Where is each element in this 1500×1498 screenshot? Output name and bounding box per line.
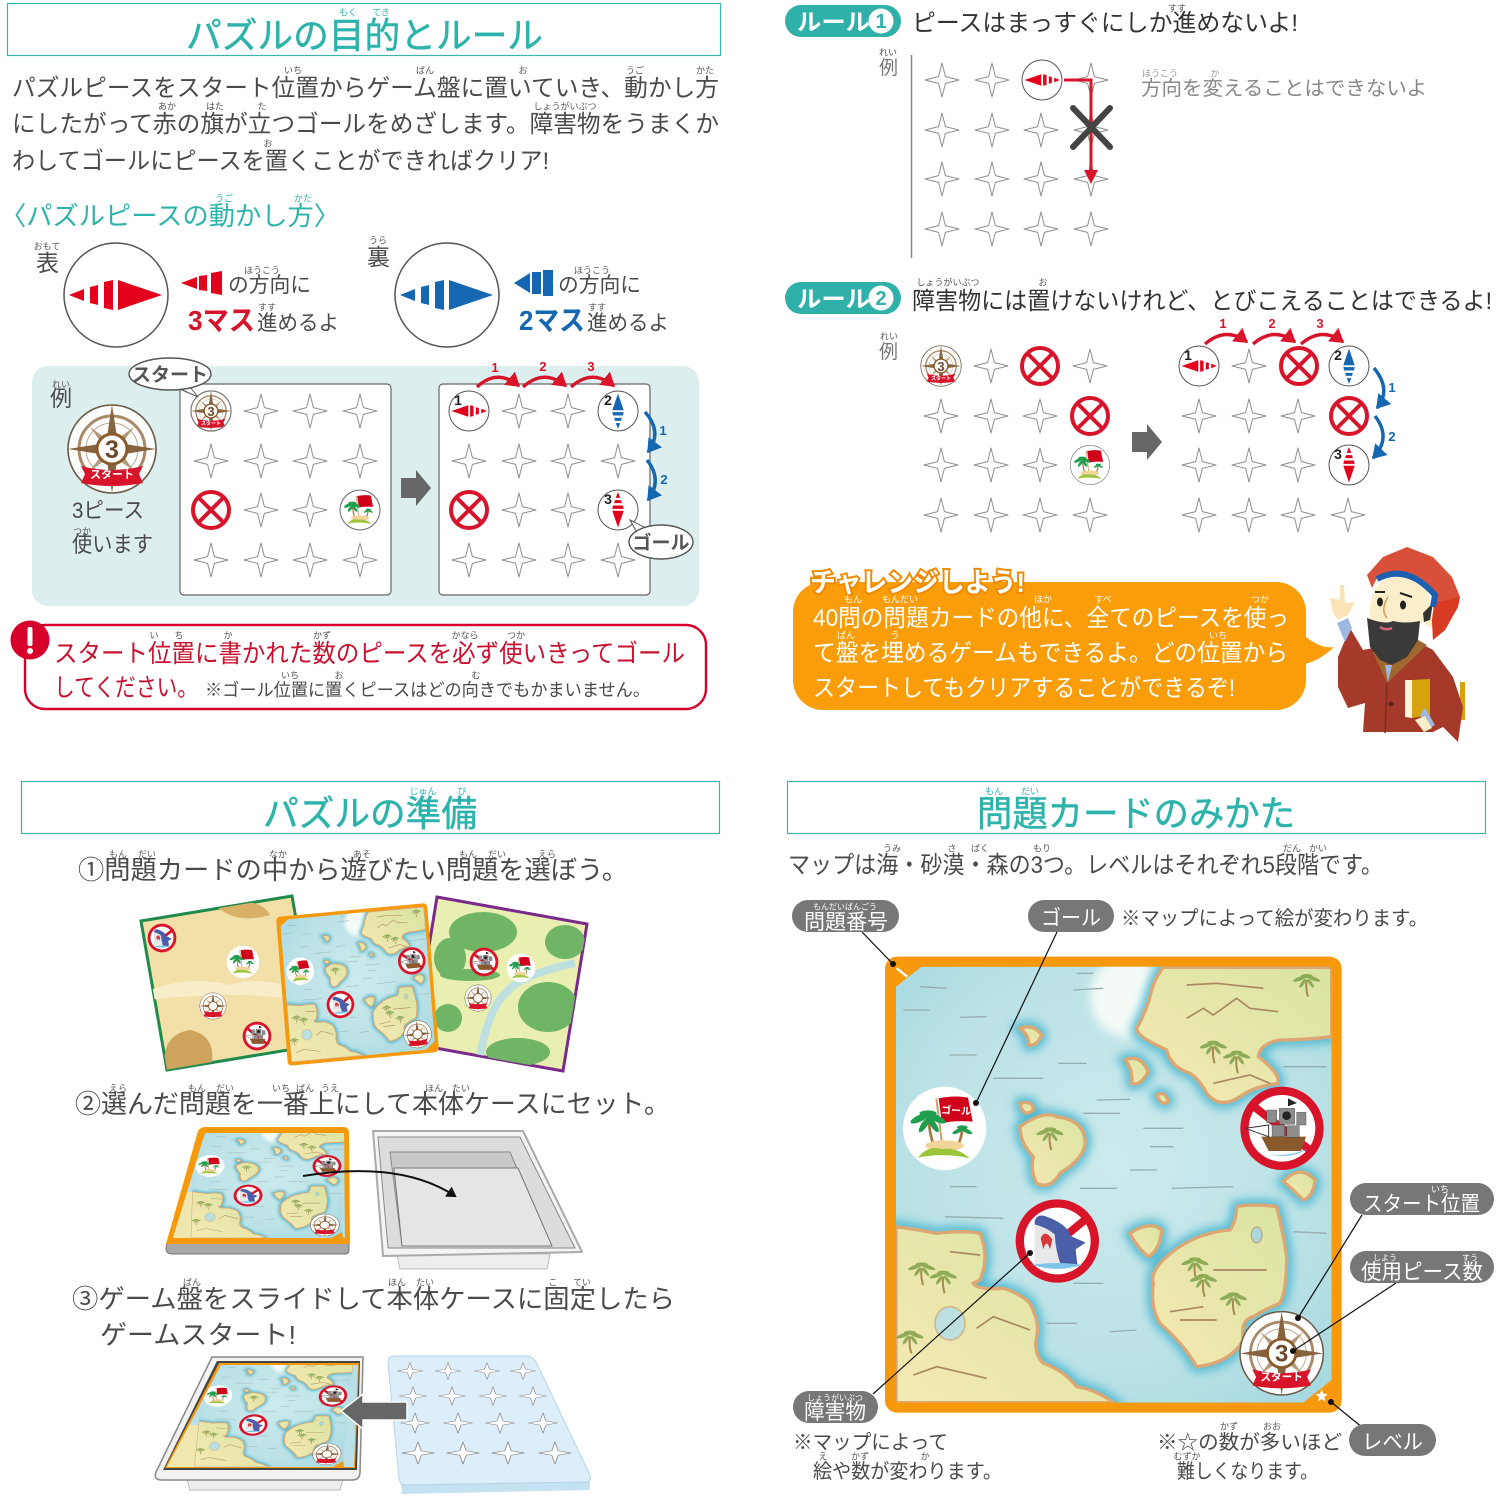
illustration: blue sliding board	[388, 1356, 590, 1494]
label: obstacle	[793, 1391, 878, 1424]
heading: preparation: じゅん	[409, 786, 437, 796]
label: goal: ゴール	[1041, 907, 1101, 930]
label: level	[1349, 1424, 1436, 1456]
label: obstacle: 障害物	[804, 1401, 866, 1424]
text: step 3: こ	[548, 1278, 558, 1288]
icon: start compass large: スタート	[90, 468, 134, 481]
label: start position: いち	[1431, 1184, 1449, 1194]
callout: warning: かず	[313, 630, 331, 640]
arrows: blue moves 1-2	[645, 412, 668, 500]
text: step 1: なか	[269, 850, 287, 860]
text block: intro paragraph: うご	[626, 64, 644, 76]
text: rule 2 heading: お	[1038, 278, 1048, 288]
text: step 3: たい	[416, 1278, 434, 1288]
callout: warning: む	[471, 670, 481, 680]
note: level stars: むずか	[1173, 1452, 1201, 1462]
game board: before: 3	[207, 404, 215, 419]
note: obstacle art	[793, 1432, 1002, 1483]
arrow: card into case	[303, 1171, 455, 1196]
arrows: blue moves 1-2: 1	[659, 423, 667, 438]
text: step 3: てい	[573, 1278, 591, 1288]
icon: start compass large: 3	[105, 436, 119, 464]
heading: reading cards: だい	[1021, 786, 1039, 796]
text: rule 2 heading: しょうがいぶつ	[916, 276, 980, 288]
callout: challenge: 40問の問題カードの他に、全てのピースを使っ	[813, 605, 1289, 632]
text: red moves 3 squares: ほうこう	[244, 266, 280, 276]
callout: warning: い	[149, 630, 159, 640]
text block: intro paragraph: にしたがって赤の旗が立つゴールをめざします。障害物をうまくか	[12, 110, 719, 138]
note: obstacle art: かず	[851, 1452, 869, 1462]
text block: intro paragraph: かた	[696, 66, 714, 76]
note: level stars: 難しくなります。	[1177, 1460, 1318, 1483]
text block: intro paragraph: あか	[158, 102, 176, 112]
text: step 3: ばん	[183, 1278, 201, 1288]
diagram: rule 2 board before: 3	[937, 359, 945, 374]
example label: れい	[880, 332, 898, 342]
note: level stars	[1157, 1422, 1342, 1483]
text: uses 3 pieces: 使います	[72, 532, 153, 557]
subheading: how to move pieces: 〈パズルピースの動かし方〉	[0, 201, 340, 231]
note: obstacle art: え	[818, 1452, 828, 1462]
diagram: rule 1 board	[912, 55, 1108, 258]
callout: warning: お	[334, 670, 344, 680]
game board: before	[180, 384, 391, 595]
illustration: empty case	[373, 1131, 582, 1269]
text: step 2: えら	[109, 1084, 127, 1094]
heading: purpose and rules	[8, 4, 720, 56]
callout: warning: いち	[281, 670, 299, 680]
back side label: 裏	[367, 244, 390, 270]
text: blue moves 2 squares: 進めるよ	[587, 312, 669, 335]
text: step 2: だい	[216, 1084, 234, 1094]
text: step 3: ③ゲーム盤をスライドして本体ケースに固定したら	[72, 1284, 675, 1314]
callout: challenge	[793, 568, 1334, 710]
diagram: rule 2 board after: 2	[1334, 347, 1342, 363]
label: obstacle: しょうがいぶつ	[807, 1392, 863, 1402]
arrows: rule 2 moves: 3	[1316, 316, 1324, 331]
label: problem number: 問題番号	[804, 911, 888, 934]
note: obstacle art: ※マップによって	[793, 1432, 948, 1454]
arrows: red moves 1-3: 2	[539, 359, 547, 374]
note: art varies by map: ※マップによって絵が変わります。	[1121, 907, 1428, 930]
diagram: rule 2 board after: 3	[1334, 446, 1342, 462]
arrows: rule 2 moves: 1	[1219, 316, 1227, 331]
text: step 1: だい	[488, 850, 506, 860]
label: pieces used: 使用ピース数	[1361, 1261, 1483, 1284]
text: rule 1 heading: ピースはまっすぐにしか進めないよ!	[912, 10, 1298, 37]
example label: れい	[52, 380, 70, 390]
text: step 1: ①問題カードの中から遊びたい問題を選ぼう。	[78, 855, 628, 885]
front side label: おもて	[34, 242, 60, 252]
text: step 1: もん	[459, 850, 477, 860]
text: step 2: たい	[452, 1084, 470, 1094]
illustration: explorer character	[1330, 547, 1465, 742]
callout: warning: ち	[174, 630, 184, 640]
illustration: desert card	[141, 896, 318, 1070]
card: sea map: ゴール	[941, 1103, 971, 1118]
card: sea map	[885, 957, 1342, 1413]
text: cannot change direction: か	[1210, 68, 1220, 78]
text: blue moves 2 squares: ほうこう	[574, 266, 610, 276]
text block: intro paragraph: た	[257, 102, 267, 112]
arrows: red moves 1-3: 1	[491, 360, 499, 375]
badge: rule 1: 1	[875, 11, 887, 33]
text: rule 2 heading: 障害物には置けないけれど、とびこえることはできるよ!	[912, 288, 1492, 315]
text: map types: さ	[947, 844, 957, 854]
badge: rule 1	[785, 5, 901, 37]
text: step 2: もん	[188, 1084, 206, 1094]
callout: warning: つか	[507, 630, 525, 640]
heading: preparation	[22, 782, 720, 834]
callout: challenge: ばん	[837, 630, 855, 640]
heading: reading cards: 問題カードのみかた	[977, 793, 1295, 834]
text: uses 3 pieces: 3ピース	[72, 498, 144, 523]
text: red moves 3 squares: の方向に	[228, 274, 311, 297]
text: cannot change direction: 方向を変えることはできないよ	[1141, 77, 1427, 100]
arrows: red moves 1-3: 3	[587, 359, 595, 374]
illustration: case with card	[155, 1352, 363, 1490]
game board: after: 1	[454, 392, 462, 408]
callout: warning: スタート位置に書かれた数のピースを必ず使いきってゴール	[54, 640, 685, 668]
text: map types: うみ	[883, 844, 901, 854]
panel: preparation	[22, 782, 720, 1494]
illustration: sea card	[276, 903, 439, 1066]
heading: reading cards	[788, 782, 1486, 834]
callout: start	[129, 358, 211, 397]
arrow: grey right	[1132, 424, 1162, 460]
illustration: card stack	[165, 1121, 355, 1254]
text: uses 3 pieces: つか	[73, 526, 91, 536]
example label: 例	[879, 57, 898, 79]
panel: how to read problem card	[788, 782, 1494, 1483]
text: blue moves 2 squares	[514, 266, 669, 336]
callout: challenge: て盤を埋めるゲームもできるよ。どの位置から	[813, 640, 1288, 667]
text: red moves 3 squares: すす	[258, 302, 276, 312]
note: level stars: かず	[1220, 1422, 1238, 1432]
callout: challenge: う	[890, 630, 900, 640]
text: step 1: もん	[109, 850, 127, 860]
text: step 3	[72, 1278, 675, 1350]
text: uses 3 pieces	[72, 498, 153, 557]
callout: challenge: ほか	[1034, 594, 1052, 604]
diagram: rule 2 board after: 1	[1184, 347, 1192, 363]
text: rule 2 heading	[912, 276, 1492, 315]
arrows: rule 2 moves: 2	[1268, 316, 1276, 331]
callout: warning: してください。	[54, 674, 198, 702]
text: step 1: だい	[138, 850, 156, 860]
text: cannot change direction	[1141, 68, 1427, 100]
badge: rule 1: ルール	[797, 9, 870, 35]
example label: 例	[50, 386, 72, 411]
text block: intro paragraph: しょうがいぶつ	[533, 100, 597, 112]
panel: rules	[785, 4, 1492, 742]
game board: after: 2	[604, 392, 612, 408]
callout: warning: かなら	[451, 630, 479, 640]
diagram: rule 2 board before	[920, 345, 1110, 532]
arrow: grey right	[401, 470, 431, 506]
callout: challenge: もん	[844, 594, 862, 604]
text: map types: マップは海・砂漠・森の3つ。レベルはそれぞれ5段階です。	[788, 852, 1383, 879]
example label: れい	[879, 48, 897, 58]
label: problem number	[792, 900, 899, 934]
text block: intro paragraph: はた	[206, 102, 224, 112]
card: sea map: スタート	[1260, 1372, 1303, 1384]
callout: challenge: もんだい	[882, 594, 918, 604]
arrow: invalid turn	[1064, 80, 1110, 184]
callout: goal	[629, 520, 693, 559]
callout: challenge: スタートしてもクリアすることができるぞ!	[813, 675, 1235, 702]
note: obstacle art: 絵や数が変わります。	[813, 1460, 1002, 1483]
text: red moves 3 squares	[181, 266, 339, 336]
text: step 1: えら	[538, 850, 556, 860]
heading: preparation: び	[457, 786, 467, 796]
callout: challenge: すべ	[1094, 594, 1112, 604]
panel: example	[32, 358, 699, 606]
heading: reading cards: もん	[985, 786, 1003, 796]
label: start position: スタート位置	[1363, 1193, 1480, 1216]
text: map types: もり	[1033, 844, 1051, 854]
note: obstacle art: か	[920, 1452, 930, 1462]
arrows: rule 2 moves	[1205, 316, 1396, 458]
text block: intro paragraph: パズルピースをスタート位置からゲーム盤に置いていき、動かし方	[12, 75, 719, 102]
label: pieces used	[1350, 1251, 1494, 1284]
text: rule 1 heading: すす	[1168, 4, 1186, 14]
game board: after: 3	[604, 491, 612, 507]
callout: warning	[10, 620, 706, 709]
example label: 例	[879, 341, 898, 363]
text: cannot change direction: ほうこう	[1142, 68, 1178, 78]
text: step 2: ばん	[296, 1084, 314, 1094]
text: blue moves 2 squares: の方向に	[558, 274, 641, 297]
back side label: うら	[369, 236, 387, 246]
text: step 3: ほん	[388, 1278, 406, 1288]
heading: preparation: パズルの準備	[263, 793, 477, 834]
text: step 2: うえ	[321, 1084, 339, 1094]
card: sea map: 3	[1275, 1341, 1288, 1368]
arrow: slide left	[341, 1394, 407, 1429]
panel: purpose and rules	[0, 4, 720, 709]
text: step 2: ほん	[425, 1084, 443, 1094]
callout: warning: ※ゴール位置に置くピースはどの向きでもかまいません。	[205, 680, 650, 700]
text: map types: かい	[1309, 844, 1327, 854]
badge: rule 2	[785, 282, 901, 314]
heading: purpose and rules: パズルの目的とルール	[186, 15, 543, 56]
heading: purpose and rules: もく	[339, 8, 357, 18]
text: map types: だん	[1283, 844, 1301, 854]
leader lines	[862, 932, 1396, 1432]
callout: warning: か	[223, 630, 233, 640]
example label	[879, 48, 898, 79]
text block: intro paragraph	[12, 64, 719, 175]
badge: rule 2: ルール	[797, 286, 870, 312]
icon: start compass large	[67, 404, 157, 494]
label: level: レベル	[1362, 1431, 1423, 1454]
front side label: 表	[36, 250, 59, 276]
text block: intro paragraph: ばん	[416, 66, 434, 76]
subheading: how to move pieces: かた	[294, 194, 312, 204]
text: red moves 3 squares: 3マス	[188, 305, 255, 336]
callout: goal: ゴール	[632, 531, 690, 554]
example label	[879, 332, 898, 363]
icon: red piece	[64, 243, 168, 347]
heading: purpose and rules: てき	[372, 8, 390, 18]
text: map types: ばく	[971, 844, 989, 854]
arrows: red moves 1-3	[477, 359, 614, 387]
subheading: how to move pieces: うご	[215, 192, 233, 204]
diagram: rule 2 board after	[1179, 346, 1369, 532]
text: step 3: ゲームスタート!	[100, 1320, 296, 1350]
text block: intro paragraph: お	[518, 66, 528, 76]
diagram: rule 2 board before: スタート	[931, 375, 951, 382]
icon: blue piece	[395, 243, 499, 347]
note: level stars: おお	[1263, 1422, 1281, 1432]
front side label	[34, 242, 60, 276]
text block: intro paragraph: いち	[284, 66, 302, 76]
game board: after	[439, 384, 650, 595]
callout: challenge: いち	[1209, 630, 1227, 640]
text: blue moves 2 squares: すす	[588, 302, 606, 312]
text: step 2: いち	[272, 1084, 290, 1094]
arrows: rule 2 moves: 1	[1388, 380, 1396, 395]
callout: start: スタート	[132, 364, 208, 386]
label: problem number: もんだいばんごう	[813, 902, 877, 912]
text: red moves 3 squares: 進めるよ	[257, 312, 339, 335]
badge: rule 2: 2	[875, 288, 887, 310]
illustration: forest card	[413, 897, 587, 1071]
callout: challenge: チャレンジしよう!	[810, 568, 1025, 598]
arrows: rule 2 moves: 2	[1388, 429, 1396, 444]
text: step 2: ②選んだ問題を一番上にして本体ケースにセット。	[75, 1089, 670, 1119]
label: start position	[1350, 1183, 1494, 1216]
label: pieces used: すう	[1462, 1254, 1478, 1262]
text block: intro paragraph: わしてゴールにピースを置くことができればクリア!	[12, 148, 549, 175]
text block: intro paragraph: お	[263, 138, 273, 148]
text: step 1: あそ	[353, 850, 371, 860]
label: pieces used: しよう	[1373, 1254, 1397, 1262]
note: level stars: ※☆の数が多いほど	[1157, 1431, 1342, 1454]
callout: challenge: つか	[1251, 594, 1269, 604]
game board: before: スタート	[201, 420, 221, 427]
arrows: blue moves 1-2: 2	[660, 472, 668, 487]
text: blue moves 2 squares: 2マス	[519, 305, 585, 336]
label: goal	[1028, 900, 1114, 932]
